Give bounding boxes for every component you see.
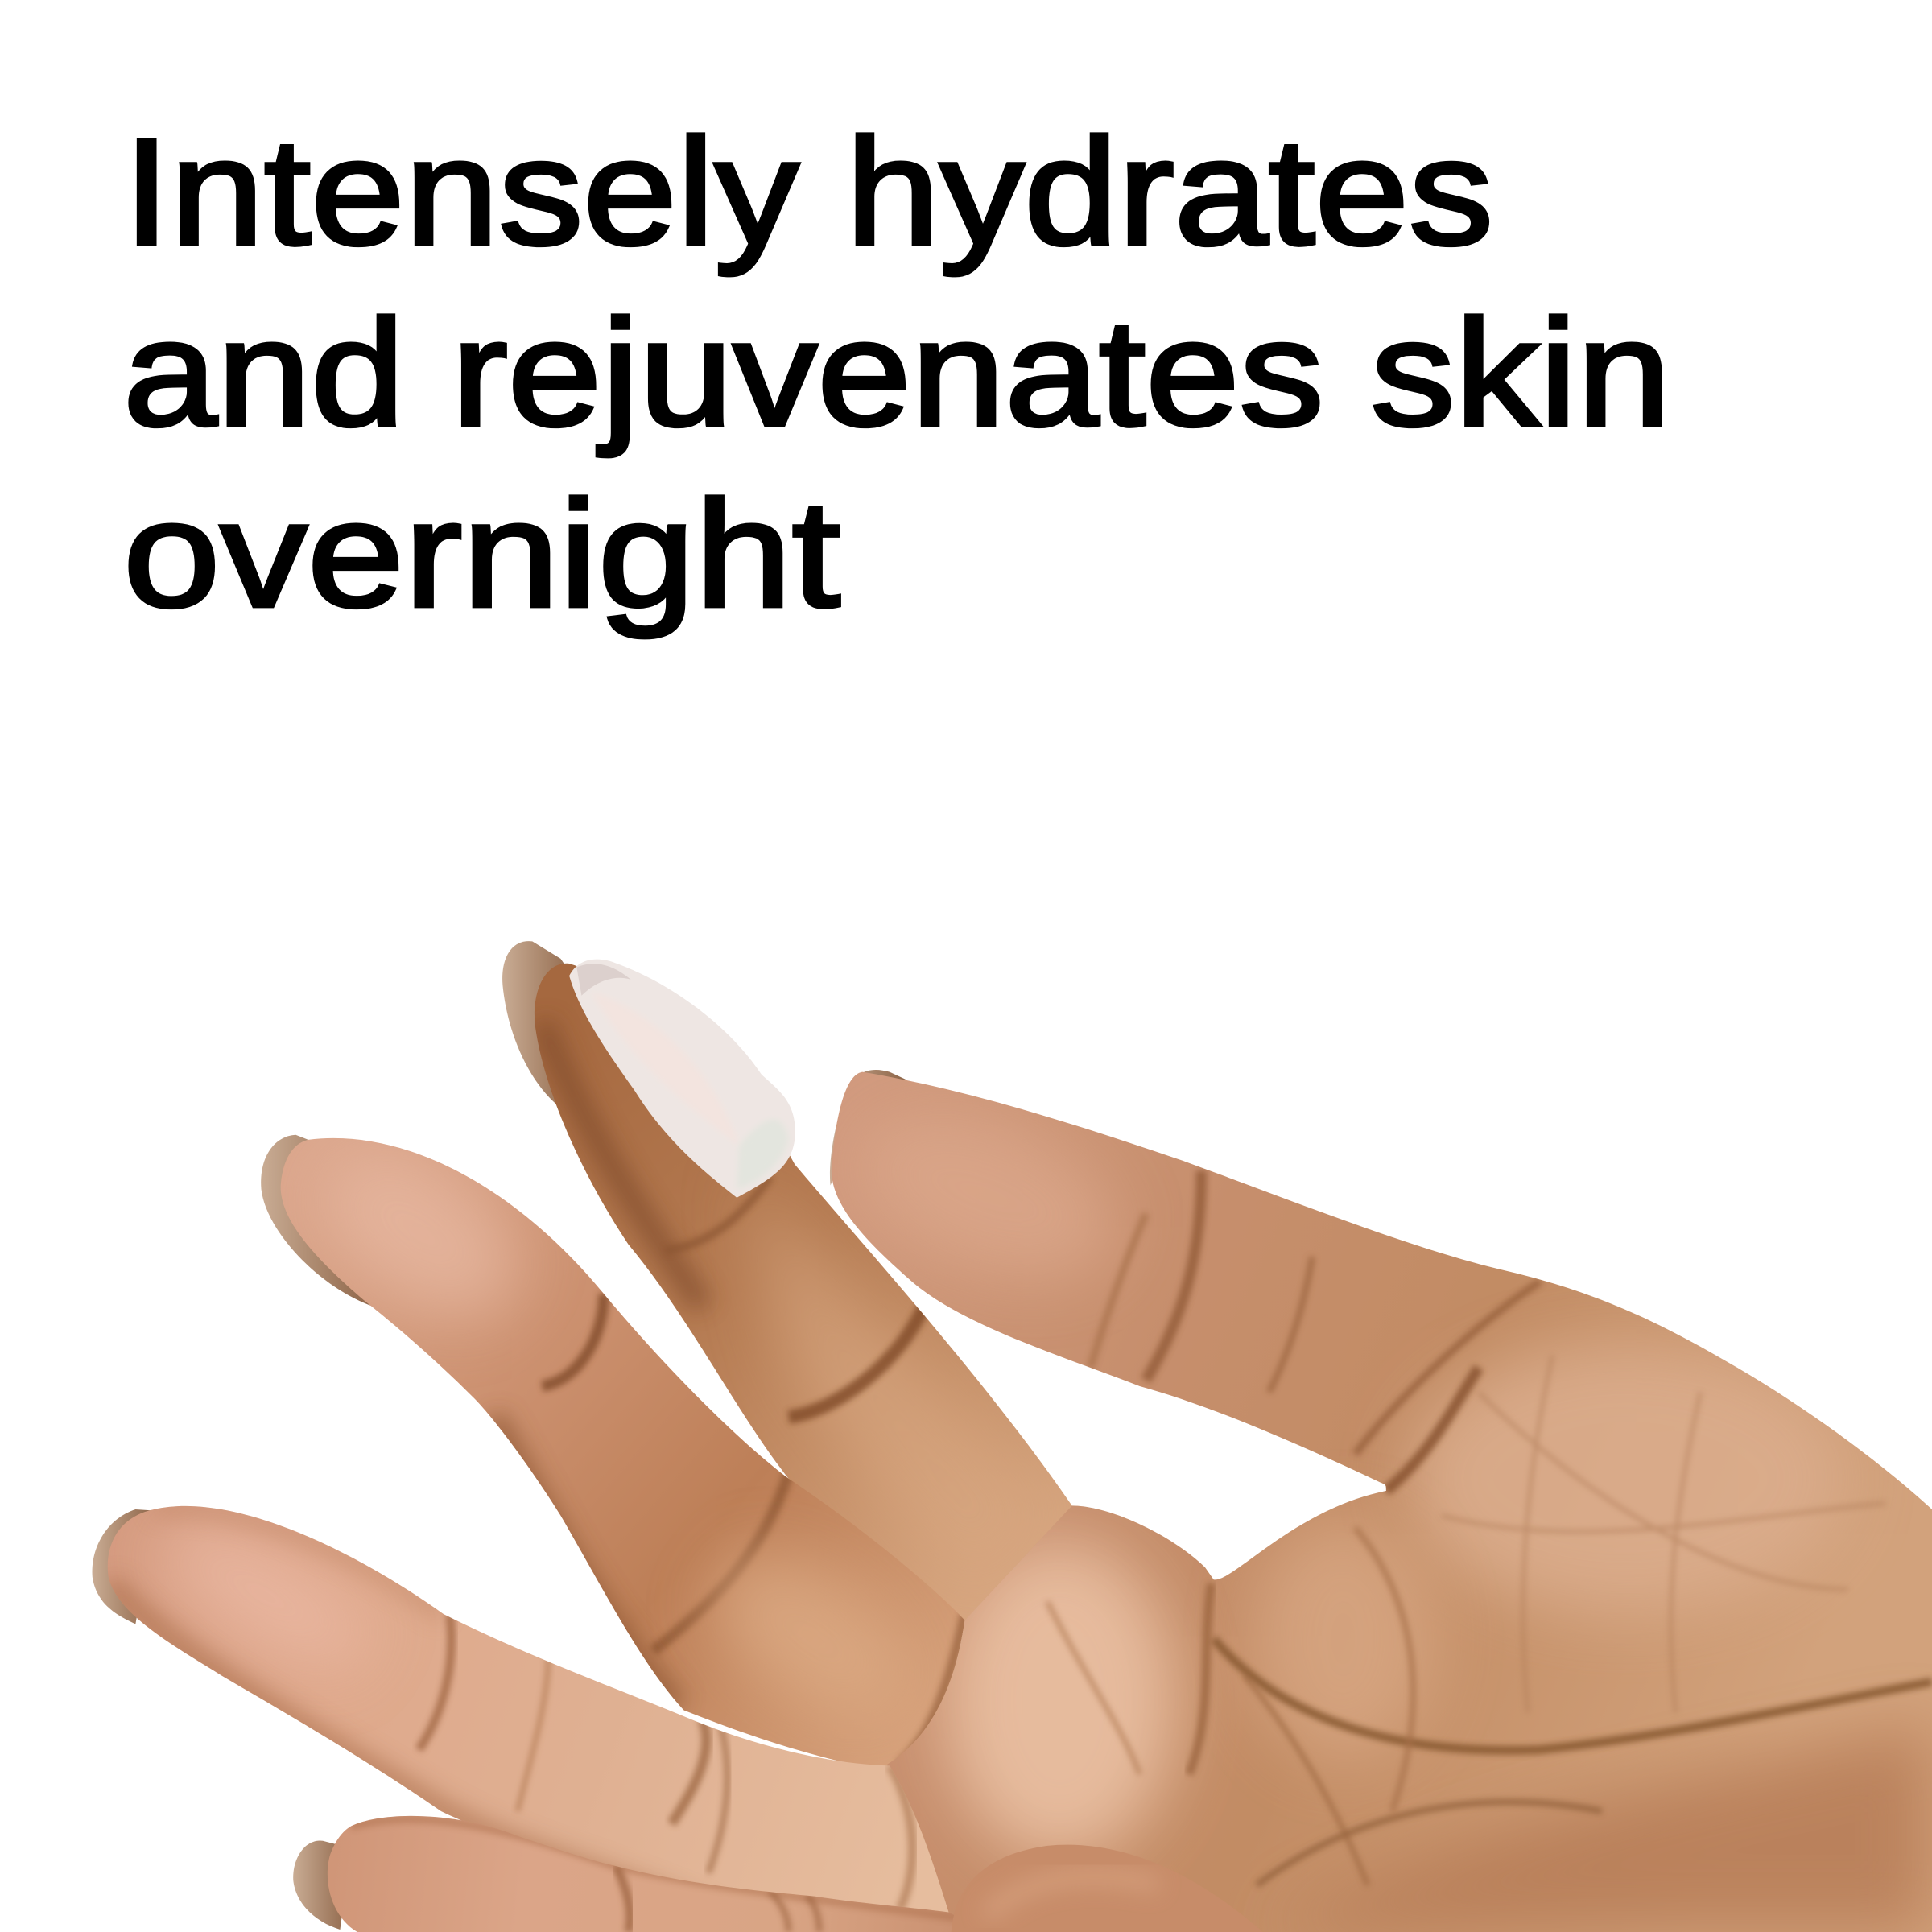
title [123,107,1671,638]
cream dollop [569,960,795,1198]
index finger with cream [502,941,1072,1626]
bottom finger [293,1816,985,1932]
hand photo illustration [93,941,1932,1932]
palm and thumb [830,1070,1932,1932]
title: Intensely hydrates [123,107,1493,276]
lower finger [93,1496,955,1932]
palm heel mound [952,1845,1263,1932]
title: and rejuvenates skin [123,288,1671,457]
middle finger [261,1113,964,1774]
title: overnight [123,469,840,638]
